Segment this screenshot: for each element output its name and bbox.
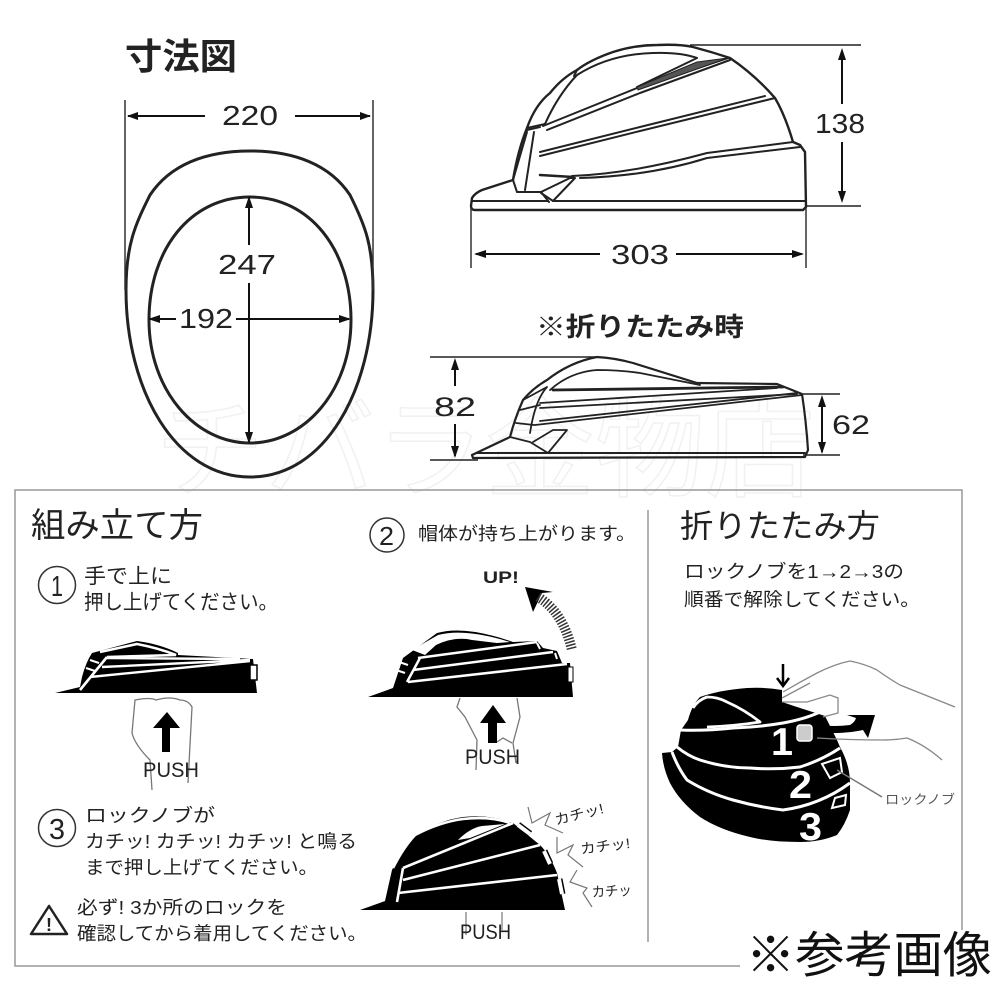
step 3 text: カチッ! カチッ! カチッ! と鳴る xyxy=(85,831,357,852)
inner width 192 dimension: 192 xyxy=(179,303,233,334)
step 2 text: 帽体が持ち上がります。 xyxy=(418,524,636,544)
step 1 helmet xyxy=(55,641,257,693)
rotate arrow xyxy=(817,715,875,738)
height 82 dimension: 82 xyxy=(434,392,476,422)
step 2 xyxy=(368,518,636,770)
instructions panel xyxy=(15,490,962,966)
lock numbers: 2 xyxy=(789,764,812,807)
height 62 dimension: 62 xyxy=(832,410,870,440)
length 303 dimension xyxy=(471,208,806,270)
folding text: ロックノブを1→2→3の xyxy=(684,561,904,582)
hand and push arrow xyxy=(457,698,520,770)
panel border xyxy=(15,490,962,966)
step 2 helmet xyxy=(368,630,573,697)
folded heading: ※折りたたみ時 xyxy=(536,312,744,342)
hand xyxy=(782,661,955,760)
hand and push arrow xyxy=(132,698,199,790)
warning xyxy=(31,897,367,944)
hand and push arrow: PUSH xyxy=(143,759,199,782)
step 1 text: 押し上げてください。 xyxy=(84,591,278,614)
side view helmet xyxy=(471,45,806,210)
step 3 number: 3 xyxy=(49,814,65,846)
height 138 dimension xyxy=(690,45,865,206)
watermark: チバラ金物店 xyxy=(155,390,815,511)
click marks: カチッ xyxy=(591,882,632,900)
depth 247 dimension: 247 xyxy=(218,249,276,280)
icon: warning triangle: ! xyxy=(46,915,52,935)
warning text: 必ず! 3か所のロックを xyxy=(77,897,287,918)
folding text xyxy=(684,561,920,610)
step 1 text: 手で上に xyxy=(84,565,172,588)
step 3 text: ロックノブが xyxy=(85,805,215,826)
warning text xyxy=(77,897,367,944)
width 220 dimension: 220 xyxy=(222,100,278,131)
depth 247 dimension xyxy=(218,196,276,444)
lock numbers: 3 xyxy=(799,806,822,849)
step 1 number xyxy=(38,566,76,604)
folding heading: 折りたたみ方 xyxy=(680,508,880,544)
step 3 number xyxy=(38,810,76,846)
step 3 helmet xyxy=(360,816,565,910)
assembly heading: 組み立て方 xyxy=(31,507,203,545)
height 82 dimension xyxy=(430,357,597,460)
push label: PUSH xyxy=(460,921,511,944)
step 3 text xyxy=(85,805,357,878)
folding text: 順番で解除してください。 xyxy=(684,589,920,610)
down arrow xyxy=(777,664,789,686)
length 303 dimension: 303 xyxy=(611,239,669,270)
step 2 number: 2 xyxy=(379,521,394,551)
top view outline xyxy=(126,151,373,477)
reference image note: ※参考画像 xyxy=(746,929,992,983)
folded helmet with lock knobs xyxy=(662,688,850,849)
step 1 xyxy=(38,565,278,790)
lock numbers: 1 xyxy=(771,721,793,764)
step 1 text xyxy=(84,565,278,614)
up arrow: UP! xyxy=(483,568,519,587)
up arrow xyxy=(483,568,572,650)
width 220 dimension xyxy=(125,100,373,290)
inner width 192 dimension xyxy=(148,303,351,334)
folded helmet side view xyxy=(472,357,808,458)
warning text: 確認してから着用してください。 xyxy=(77,923,367,944)
lock knob callout xyxy=(837,770,955,807)
click marks xyxy=(528,800,632,907)
height 138 dimension: 138 xyxy=(815,108,865,139)
lock knob callout: ロックノブ xyxy=(885,792,955,807)
step 3 text: まで押し上げてください。 xyxy=(85,857,318,878)
title: dimension drawing: 寸法図 xyxy=(125,36,237,77)
hand and push arrow: PUSH xyxy=(465,746,520,769)
height 62 dimension xyxy=(803,394,870,455)
icon: warning triangle xyxy=(31,906,67,935)
push label xyxy=(460,912,511,944)
step 1 number: 1 xyxy=(51,571,63,603)
lock numbers xyxy=(771,721,822,849)
top view helmet dimensions xyxy=(125,100,373,477)
click marks: カチッ! xyxy=(553,800,605,828)
click marks: カチッ! xyxy=(579,835,631,857)
step 2 number xyxy=(370,518,404,552)
step 3 xyxy=(38,800,632,944)
